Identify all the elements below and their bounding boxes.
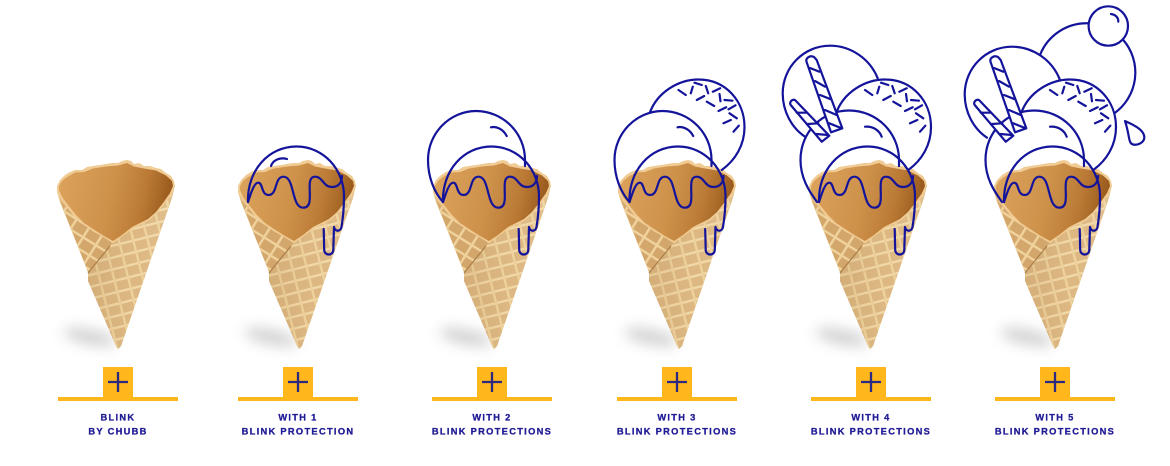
plus badge [432,367,552,401]
label: WITH 4 [851,413,891,423]
panel: with 1 protection [238,146,358,436]
panel: with 5 protections [965,6,1144,436]
label: BLINK [101,413,135,423]
label: WITH 2 [472,413,512,423]
icon: cone with four scoops and wafers [783,46,931,349]
label: BLINK PROTECTIONS [811,426,931,436]
panel: Blink by Chubb [57,160,178,436]
plus badge [811,367,931,401]
plus badge [238,367,358,401]
label: WITH 1 [278,413,318,423]
label: BLINK PROTECTIONS [432,426,552,436]
icon: cone with five scoops, cherry and drop [965,6,1144,349]
label: BLINK PROTECTION [242,426,354,436]
label: BY CHUBB [88,426,148,436]
panel: with 2 protections [428,111,552,436]
icon: empty waffle cone [57,160,175,349]
icon: cone with one scoop [238,146,356,349]
label: WITH 5 [1035,413,1075,423]
label: BLINK PROTECTIONS [617,426,737,436]
plus badge [617,367,737,401]
icon: cone with three scoops and sprinkles [614,80,744,349]
panel: with 3 protections [614,80,744,436]
icon: cone with two scoops [428,111,551,349]
plus badge [58,367,178,401]
label: WITH 3 [657,413,697,423]
panel: with 4 protections [783,46,931,436]
plus badge [995,367,1115,401]
label: BLINK PROTECTIONS [995,426,1115,436]
